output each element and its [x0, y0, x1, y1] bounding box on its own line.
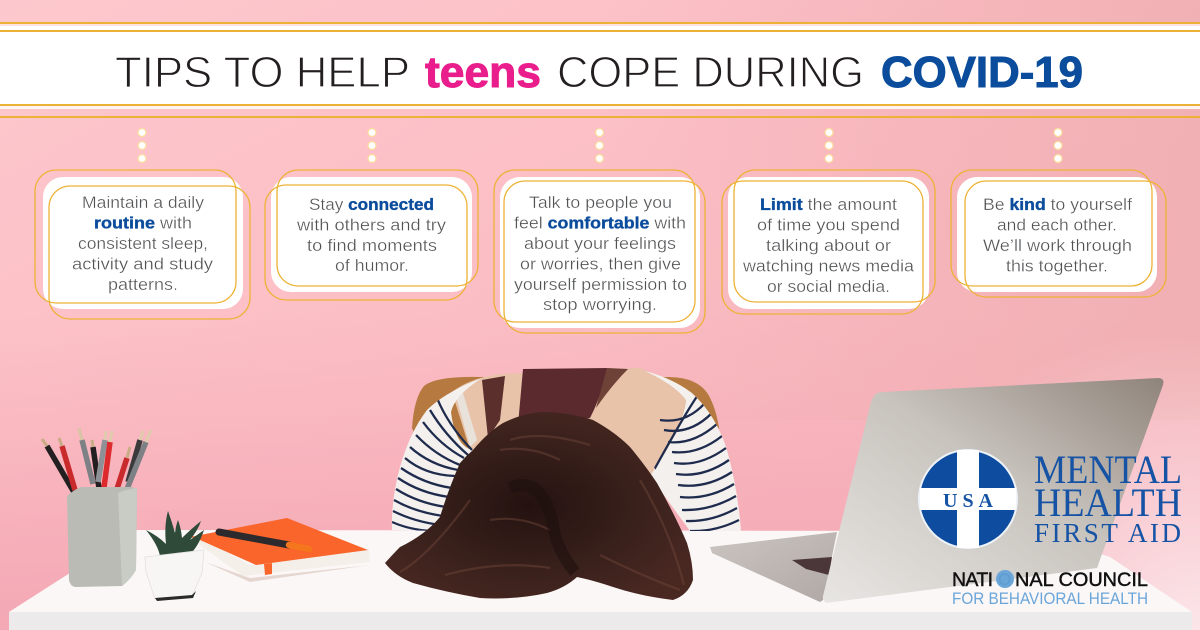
- title banner: [0, 22, 1200, 118]
- panel: tip 2 connected: Stay connected: [309, 195, 434, 214]
- hair highlights: [400, 436, 684, 590]
- connector dots: [138, 128, 1062, 162]
- chair: [412, 377, 719, 470]
- bra strap: [456, 393, 477, 447]
- logo: National Council for Behavioral Health: [952, 569, 1148, 608]
- panel: tip 3 comfortable: about your feelings: [524, 234, 676, 253]
- panel: tip 3 comfortable: stop worrying.: [543, 295, 657, 314]
- title: [115, 48, 1083, 97]
- panel: tip 2 connected: to find moments: [307, 236, 437, 255]
- shadow: [205, 562, 370, 582]
- title: COPE DURING: [557, 48, 864, 97]
- title: TIPS TO HELP: [115, 48, 410, 97]
- cover: [190, 518, 368, 565]
- panel: tip 3 comfortable: feel comfortable with: [514, 214, 686, 232]
- panel: tip 3 comfortable: Talk to people you: [529, 193, 672, 212]
- plant pot: [145, 511, 204, 601]
- panel: tip 1 routine: activity and study: [72, 254, 214, 274]
- panel: tip 1 routine: consistent sleep,: [78, 234, 208, 253]
- desk: [9, 530, 1192, 630]
- logo: National Council for Behavioral Health: FOR BEHAVIORAL HEALTH: [952, 590, 1148, 608]
- right sleeve: [645, 371, 741, 531]
- panel: tip 2 connected: of humor.: [335, 256, 409, 275]
- title: teens: [425, 48, 541, 97]
- panel: tip 3 comfortable: yourself permission to: [514, 275, 687, 294]
- panel: tip 1 routine: routine with: [94, 214, 192, 232]
- panel: tip 1 routine: patterns.: [108, 275, 178, 294]
- pencils: [42, 428, 151, 495]
- panel: tip 2 connected: with others and try: [296, 216, 447, 234]
- pen: [219, 532, 289, 545]
- wordmark: [1034, 447, 1182, 548]
- title: COVID-19: [881, 48, 1083, 97]
- back hair: [482, 368, 628, 438]
- panel: tip 5 kind: We’ll work through: [983, 236, 1132, 255]
- laptop: [710, 378, 1163, 603]
- cup: [67, 487, 137, 587]
- panel: tip 4 limit: Limit the amount: [760, 195, 897, 214]
- logo: National Council for Behavioral Health: NAL COUNCIL: [1015, 569, 1148, 591]
- panel: tip 3 comfortable: or worries, then give: [520, 254, 681, 274]
- panel: tip 1 routine: Maintain a daily: [82, 193, 205, 212]
- panel: tip 4 limit: of time you spend: [757, 216, 900, 234]
- left sleeve: [392, 378, 482, 531]
- panel: tip 2 connected: [265, 170, 478, 300]
- wordmark: HEALTH: [1034, 480, 1182, 525]
- pencil cup with pencils: [42, 428, 151, 587]
- panel: tip 4 limit: or social media.: [767, 277, 890, 296]
- panel: tip 5 kind: and each other.: [997, 216, 1117, 234]
- panel: tip 4 limit: talking about or: [766, 236, 892, 255]
- pages: [197, 538, 370, 576]
- lid: [823, 378, 1163, 603]
- panel: tip 4 limit: watching news media: [742, 256, 915, 276]
- logo: Mental Health First Aid USA: [918, 447, 1182, 549]
- icon: cross emblem: USA: [943, 490, 994, 512]
- panel: tip 5 kind: this together.: [1006, 256, 1108, 276]
- panel: tip 4 limit: [722, 170, 935, 314]
- icon: cross emblem: [918, 449, 1018, 549]
- base: [710, 532, 837, 602]
- panel: tip 1 routine: [35, 170, 250, 319]
- panel: tip 3 comfortable: [494, 170, 705, 333]
- woman: [385, 368, 741, 600]
- hair parting: [510, 485, 575, 572]
- keyboard: [792, 557, 832, 575]
- logo: National Council for Behavioral Health: O: [998, 570, 1011, 589]
- elastic: [264, 563, 272, 575]
- panel: tip 5 kind: [951, 170, 1166, 297]
- notebook with pen: [190, 518, 370, 582]
- head hair: [385, 412, 693, 600]
- panel: tip 5 kind: Be kind to yourself: [983, 195, 1132, 214]
- logo: National Council for Behavioral Health: NATI: [952, 569, 993, 591]
- skin: [452, 368, 686, 530]
- wordmark: FIRST AID: [1034, 518, 1181, 548]
- wordmark: MENTAL: [1034, 447, 1182, 492]
